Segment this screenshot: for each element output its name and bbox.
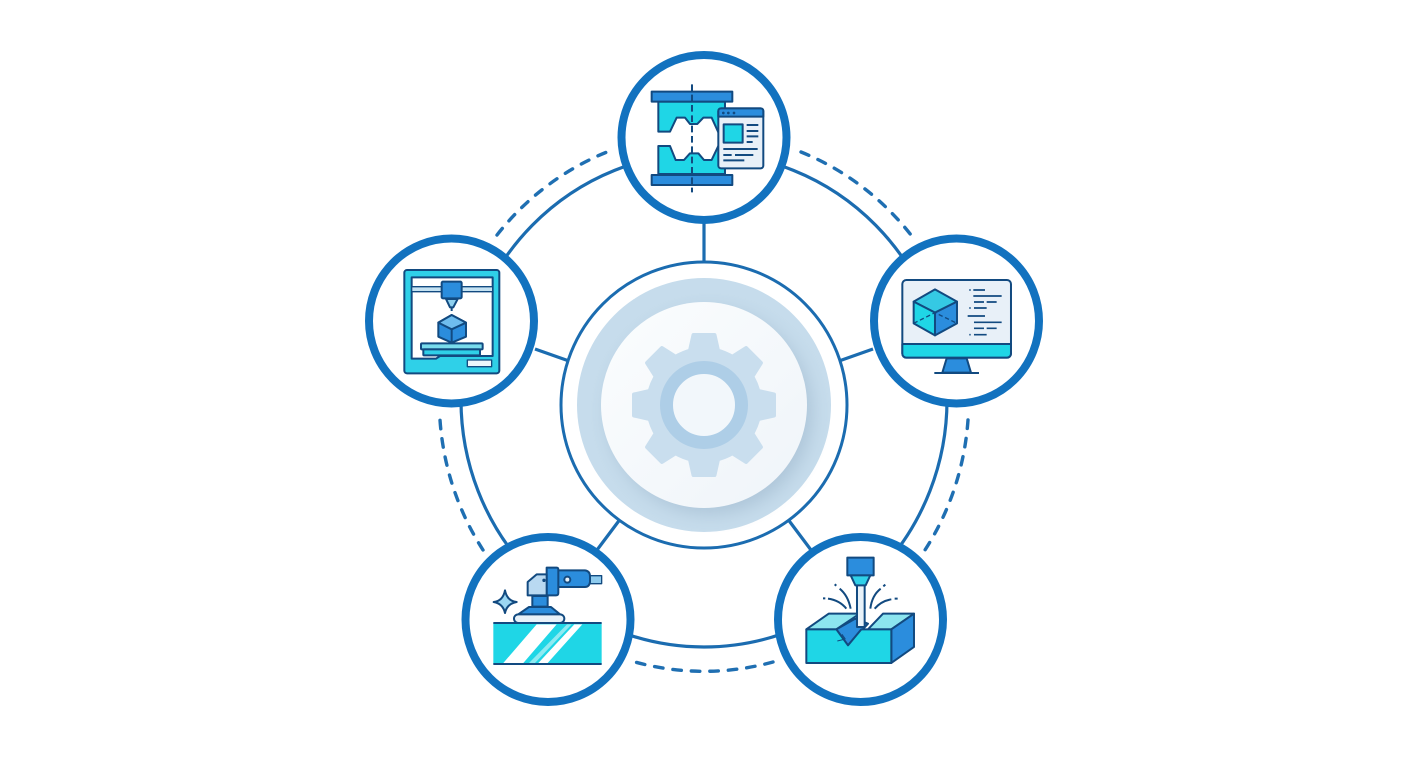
icon: polisher on glass block — [493, 568, 602, 664]
station: 3D printing (left) — [369, 238, 534, 404]
station: machining (bottom right) — [778, 537, 943, 702]
icon: computer monitor with 3D cube — [902, 280, 1011, 373]
hub disc shadow — [608, 310, 812, 514]
hub disc — [601, 302, 807, 508]
station: mold design (top) — [622, 55, 786, 220]
solid connecting ring — [461, 153, 947, 647]
icon: 3D printer — [404, 270, 499, 373]
spokes from hub to stations — [535, 222, 873, 550]
hub outer ring — [561, 262, 847, 548]
hub pale band — [577, 278, 831, 532]
central hub with gear — [561, 262, 847, 548]
station: CAD software (right) — [874, 238, 1039, 404]
station: polishing (bottom left) — [466, 537, 630, 702]
icon: milling tool cutting block — [806, 558, 914, 663]
icon: injection mold with document — [652, 84, 763, 192]
icon: gear — [634, 335, 774, 475]
dashed outer ring segments — [440, 152, 968, 671]
